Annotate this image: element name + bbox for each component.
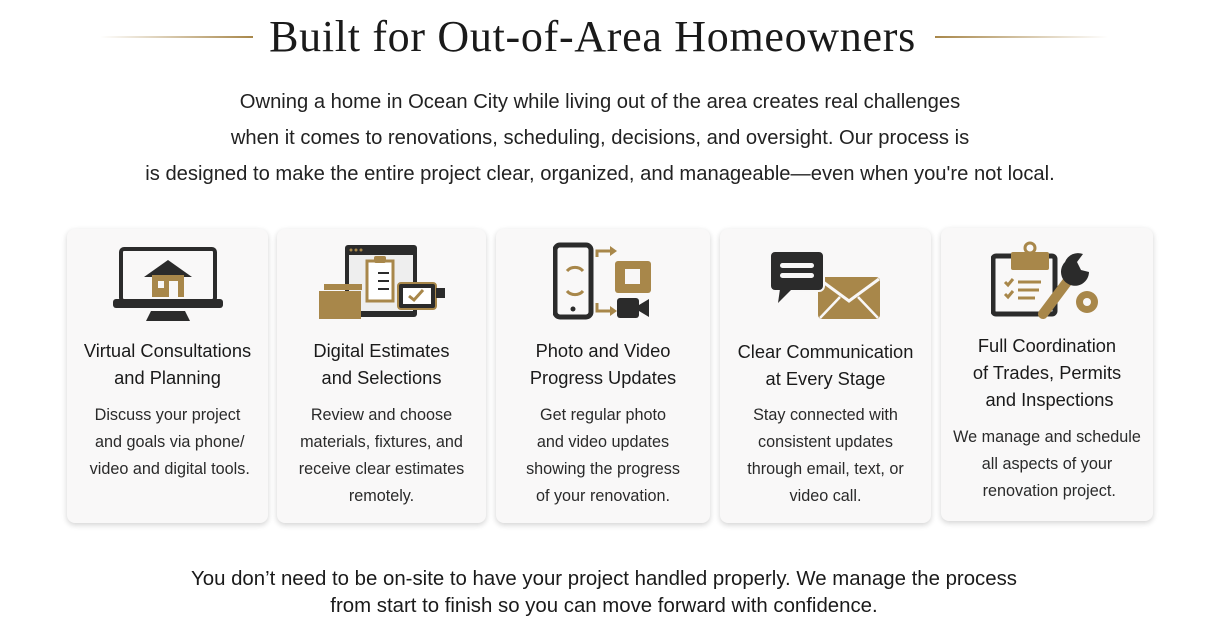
description: and goals via phone/ (95, 433, 244, 451)
description (90, 406, 250, 478)
description (526, 406, 680, 505)
icon: chat and envelope (771, 252, 880, 319)
description (953, 428, 1141, 500)
description: all aspects of your (982, 455, 1112, 473)
description: Stay connected with (753, 406, 898, 424)
heading: Full Coordination (978, 335, 1116, 356)
left title rule (100, 36, 253, 38)
heading: and Planning (114, 367, 221, 388)
panel: communication (720, 229, 931, 523)
heading: of Trades, Permits (973, 362, 1121, 383)
intro text: is designed to make the entire project clear, organized, and manageable—even when you're not local. (145, 163, 1055, 185)
title: Built for Out-of-Area Homeowners (269, 12, 916, 61)
icon: phone and video (553, 242, 651, 320)
intro text: when it comes to renovations, scheduling, decisions, and oversight. Our process is (231, 127, 969, 149)
footer text: from start to finish so you can move forward with confidence. (330, 595, 878, 617)
description: We manage and schedule (953, 428, 1141, 446)
heading: Clear Communication (738, 341, 913, 362)
heading: and Selections (322, 367, 441, 388)
heading: Progress Updates (530, 367, 676, 388)
heading: Digital Estimates (313, 340, 450, 361)
icon: clipboard, wrench, gear (991, 242, 1098, 319)
heading (313, 340, 450, 388)
panel: photo and video (496, 229, 710, 523)
description: Review and choose (311, 406, 452, 424)
description: Get regular photo (540, 406, 666, 424)
heading (530, 340, 676, 388)
description: renovation project. (983, 482, 1116, 500)
footer text: You don’t need to be on-site to have your project handled properly. We manage the process (191, 568, 1017, 590)
description: consistent updates (758, 433, 893, 451)
description: of your renovation. (536, 487, 670, 505)
panel: digital estimates (277, 229, 486, 523)
description: receive clear estimates (299, 460, 464, 478)
description: video call. (790, 487, 861, 505)
footer text (191, 568, 1017, 617)
description: Discuss your project (95, 406, 240, 424)
description: showing the progress (526, 460, 680, 478)
heading (84, 340, 251, 388)
icon: monitor with house (113, 247, 223, 321)
panel: coordination (941, 228, 1153, 521)
heading: at Every Stage (766, 368, 885, 389)
panel: virtual consultations (67, 229, 268, 523)
heading: Virtual Consultations (84, 340, 251, 361)
description: video and digital tools. (90, 460, 250, 478)
description (299, 406, 464, 505)
description: remotely. (349, 487, 414, 505)
description: materials, fixtures, and (300, 433, 463, 451)
description: through email, text, or (747, 460, 904, 478)
right title rule (935, 36, 1108, 38)
heading: Photo and Video (536, 340, 670, 361)
intro text (145, 91, 1055, 185)
icon: estimates (319, 245, 445, 319)
description (747, 406, 904, 505)
heading (973, 335, 1121, 410)
description: and video updates (537, 433, 669, 451)
intro text: Owning a home in Ocean City while living out of the area creates real challenges (240, 91, 960, 113)
heading: and Inspections (986, 389, 1114, 410)
heading (738, 341, 913, 389)
